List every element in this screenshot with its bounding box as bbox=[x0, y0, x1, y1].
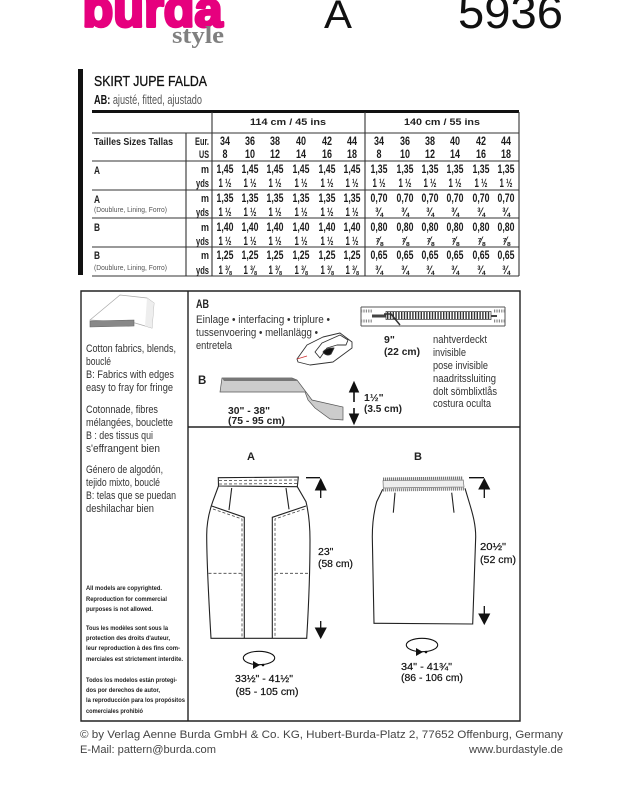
fabric recommendations: tejido mixto, bouclé bbox=[86, 477, 160, 489]
size and yardage values: 1,45 bbox=[266, 164, 284, 176]
size and yardage values: 1,40 bbox=[266, 222, 284, 234]
size and yardage values: 40 bbox=[296, 136, 306, 148]
size and yardage values: ⅞ bbox=[451, 236, 460, 248]
row labels: A bbox=[94, 194, 100, 206]
width headers bbox=[250, 117, 480, 128]
fabric recommendations: Cotton fabrics, blends, bbox=[86, 343, 176, 355]
size and yardage values: 16 bbox=[322, 149, 332, 161]
skirt B length bbox=[480, 541, 516, 566]
unit labels: yds bbox=[196, 207, 209, 219]
skirt A length: 23" bbox=[318, 546, 334, 558]
fringe strip bbox=[220, 378, 343, 420]
size and yardage values: 1 ½ bbox=[372, 178, 386, 190]
size and yardage values: 42 bbox=[322, 136, 332, 148]
size and yardage values: ¾ bbox=[401, 265, 410, 277]
size and yardage values: ¾ bbox=[477, 207, 486, 219]
subtitle: AB: ajusté, fitted, ajustado bbox=[94, 93, 202, 107]
size and yardage values: 1,35 bbox=[498, 164, 515, 176]
size and yardage values: 1 ½ bbox=[346, 236, 359, 248]
hip size A: 33½" - 41½" bbox=[235, 673, 293, 685]
size and yardage values: 0,80 bbox=[422, 222, 438, 234]
zipper text: invisible bbox=[433, 347, 466, 359]
size and yardage values: 1,35 bbox=[370, 164, 388, 176]
hip size B bbox=[401, 661, 463, 684]
skirt B length: (52 cm) bbox=[480, 554, 516, 566]
size and yardage values: 0,80 bbox=[498, 222, 514, 234]
size and yardage values: 1,35 bbox=[396, 164, 414, 176]
size and yardage values: 1 ⅜ bbox=[268, 265, 282, 277]
size and yardage values: 8 bbox=[222, 149, 228, 161]
copyright notice: Todos los modelos están protegi- bbox=[86, 677, 177, 684]
size and yardage values: 1,40 bbox=[216, 222, 234, 234]
strip length: (75 - 95 cm) bbox=[228, 415, 285, 427]
size and yardage values: 1 ⅜ bbox=[218, 265, 232, 277]
size and yardage values: 1 ½ bbox=[474, 178, 488, 190]
unit labels: m bbox=[201, 222, 209, 234]
size and yardage values: 0,70 bbox=[446, 193, 464, 205]
size and yardage values: 1,25 bbox=[216, 250, 234, 262]
footer website: www.burdastyle.de bbox=[468, 744, 563, 756]
size and yardage values: 36 bbox=[400, 136, 410, 148]
size and yardage values: ¾ bbox=[426, 265, 435, 277]
skirt B length arrow bbox=[469, 478, 490, 624]
size and yardage values: ⅞ bbox=[502, 236, 511, 248]
size and yardage values: 1,45 bbox=[344, 164, 361, 176]
size and yardage values: 1,45 bbox=[292, 164, 310, 176]
unit labels: yds bbox=[196, 236, 209, 248]
unit labels bbox=[195, 136, 209, 277]
size and yardage values: 1 ½ bbox=[294, 207, 308, 219]
fabric recommendations: bouclé bbox=[86, 356, 111, 368]
panel frame bbox=[81, 291, 520, 721]
unit labels: Eur. bbox=[195, 136, 209, 148]
fabric recommendations: Género de algodón, bbox=[86, 464, 163, 476]
size and yardage values: 1 ½ bbox=[218, 207, 232, 219]
fabric recommendations: Cotonnade, fibres bbox=[86, 404, 158, 416]
footer copyright: © by Verlag Aenne Burda GmbH & Co. KG, Hubert-Burda-Platz 2, 77652 Offenburg, Germany bbox=[80, 729, 564, 741]
width headers: 114 cm / 45 ins bbox=[250, 117, 326, 128]
size and yardage values: 0,65 bbox=[498, 250, 515, 262]
fabric recommendations: B : des tissus qui bbox=[86, 430, 153, 442]
table grid bbox=[92, 110, 519, 276]
size and yardage values: 1 ½ bbox=[294, 236, 308, 248]
size and yardage values: 1,45 bbox=[216, 164, 234, 176]
copyright notice: la reproducción para los propósitos bbox=[86, 697, 185, 704]
size and yardage values: 8 bbox=[376, 149, 382, 161]
copyright notice: All models are copyrighted. bbox=[86, 585, 162, 592]
size and yardage values: 1 ½ bbox=[268, 207, 282, 219]
fabric recommendations: B: telas que se puedan bbox=[86, 490, 176, 502]
size and yardage values: 1,40 bbox=[318, 222, 336, 234]
fabric recommendations bbox=[86, 343, 176, 515]
size and yardage values: 0,65 bbox=[446, 250, 464, 262]
size and yardage values: 0,70 bbox=[498, 193, 514, 205]
size and yardage values: 14 bbox=[450, 149, 460, 161]
zipper length: (22 cm) bbox=[384, 346, 420, 358]
B label for fringe strip: B bbox=[198, 375, 206, 387]
title: SKIRT JUPE FALDA bbox=[94, 73, 207, 90]
fabric recommendations: mélangées, bouclette bbox=[86, 417, 173, 429]
size and yardage values: 1 ½ bbox=[398, 178, 412, 190]
size and yardage values: 1 ⅜ bbox=[244, 265, 257, 277]
size and yardage values: 1 ½ bbox=[218, 236, 232, 248]
fabric recommendations: deshilachar bien bbox=[86, 503, 154, 515]
zipper text: nahtverdeckt bbox=[433, 334, 487, 346]
size and yardage values: 18 bbox=[347, 149, 357, 161]
row labels: B bbox=[94, 222, 100, 234]
skirt B bbox=[372, 478, 476, 624]
size and yardage values: 10 bbox=[400, 149, 410, 161]
unit labels: yds bbox=[196, 178, 209, 190]
size and yardage values: 12 bbox=[425, 149, 435, 161]
size and yardage values: ⅞ bbox=[477, 236, 486, 248]
size and yardage values: 1,35 bbox=[422, 164, 439, 176]
size and yardage values: 0,65 bbox=[422, 250, 439, 262]
row labels: B bbox=[94, 250, 100, 262]
size and yardage values: 1 ½ bbox=[346, 178, 359, 190]
unit labels: m bbox=[201, 250, 209, 262]
zipper length bbox=[384, 334, 420, 358]
skirt A bbox=[207, 477, 310, 638]
size and yardage values: 1,35 bbox=[344, 193, 361, 205]
size and yardage values: 1,35 bbox=[242, 193, 259, 205]
copyright notice bbox=[86, 585, 185, 715]
size and yardage values: ⅞ bbox=[375, 236, 384, 248]
strip width bbox=[364, 392, 402, 415]
size and yardage values: 0,80 bbox=[446, 222, 464, 234]
size and yardage values: ¾ bbox=[451, 265, 460, 277]
size and yardage values: 1,25 bbox=[242, 250, 259, 262]
strip length: 30" - 38" bbox=[228, 405, 270, 417]
skirt A length arrow bbox=[306, 478, 326, 638]
size and yardage values bbox=[216, 136, 515, 277]
size and yardage values: 1 ⅜ bbox=[346, 265, 359, 277]
size and yardage values: 18 bbox=[501, 149, 511, 161]
zipper text: costura oculta bbox=[433, 398, 492, 410]
size and yardage values: 0,80 bbox=[370, 222, 388, 234]
fabric recommendations: B: Fabrics with edges bbox=[86, 369, 174, 381]
size and yardage values: 1,40 bbox=[292, 222, 310, 234]
icon: hip measure B bbox=[406, 638, 438, 656]
icon: fabric stack bbox=[90, 295, 154, 328]
size and yardage values: 1 ½ bbox=[424, 178, 437, 190]
hip size A bbox=[235, 673, 298, 698]
icon: hip measure A bbox=[243, 651, 275, 669]
size and yardage values: 42 bbox=[476, 136, 486, 148]
copyright notice: leur reproduction à des fins com- bbox=[86, 645, 180, 652]
size and yardage values: ⅞ bbox=[401, 236, 410, 248]
copyright notice: Reproduction for commercial bbox=[86, 596, 167, 603]
size and yardage values: 1,35 bbox=[216, 193, 234, 205]
size and yardage values: 44 bbox=[501, 136, 511, 148]
yardage table bbox=[92, 110, 519, 277]
interfacing text: entretela bbox=[196, 340, 233, 352]
row labels: Tailles Sizes Tallas bbox=[94, 136, 173, 148]
size and yardage values: 1 ½ bbox=[320, 178, 334, 190]
size and yardage values: ¾ bbox=[375, 207, 384, 219]
label A: A bbox=[247, 451, 255, 463]
size and yardage values: 1,45 bbox=[242, 164, 259, 176]
copyright notice: merciales est strictement interdite. bbox=[86, 656, 183, 663]
size and yardage values: 1 ½ bbox=[448, 178, 462, 190]
interfacing text: Einlage • interfacing • triplure • bbox=[196, 314, 330, 326]
size and yardage values: ¾ bbox=[375, 265, 384, 277]
copyright notice: purposes is not allowed. bbox=[86, 606, 153, 613]
size and yardage values: 0,80 bbox=[472, 222, 490, 234]
zipper length: 9" bbox=[384, 334, 395, 346]
strip width: (3.5 cm) bbox=[364, 403, 402, 415]
size and yardage values: 10 bbox=[245, 149, 255, 161]
size and yardage values: 1,40 bbox=[344, 222, 360, 234]
size and yardage values: 1,25 bbox=[292, 250, 310, 262]
copyright notice: dos por derechos de autor, bbox=[86, 687, 160, 694]
size and yardage values: ¾ bbox=[426, 207, 435, 219]
size and yardage values: 1,35 bbox=[472, 164, 490, 176]
zipper text: naadritssluiting bbox=[433, 373, 496, 385]
size and yardage values: ⅞ bbox=[426, 236, 435, 248]
row labels: (Doublure, Lining, Forro) bbox=[94, 205, 167, 214]
size and yardage values: 1 ½ bbox=[268, 178, 282, 190]
size and yardage values: 0,70 bbox=[370, 193, 388, 205]
strip length bbox=[228, 405, 285, 427]
size and yardage values: 0,65 bbox=[396, 250, 414, 262]
size and yardage values: 1 ½ bbox=[346, 207, 359, 219]
unit labels: m bbox=[201, 193, 209, 205]
size and yardage values: 1,35 bbox=[266, 193, 284, 205]
size and yardage values: 38 bbox=[425, 136, 435, 148]
unit labels: m bbox=[201, 164, 209, 176]
size and yardage values: 1 ½ bbox=[268, 236, 282, 248]
hip size B: 34" - 41¾" bbox=[401, 661, 452, 673]
size and yardage values: ¾ bbox=[477, 265, 486, 277]
interfacing text: tussenvoering • mellanlägg • bbox=[196, 327, 318, 339]
size and yardage values: 34 bbox=[220, 136, 230, 148]
size and yardage values: 0,65 bbox=[370, 250, 388, 262]
row labels: (Doublure, Lining, Forro) bbox=[94, 263, 167, 272]
unit labels: yds bbox=[196, 265, 209, 277]
size and yardage values: 1 ½ bbox=[320, 207, 334, 219]
icon: iron bbox=[297, 333, 352, 365]
size and yardage values: ¾ bbox=[502, 265, 511, 277]
size and yardage values: 1 ½ bbox=[218, 178, 232, 190]
strip width: 1½" bbox=[364, 392, 384, 404]
interfacing text bbox=[196, 314, 330, 352]
size and yardage values: 0,65 bbox=[472, 250, 490, 262]
size and yardage values: 1,25 bbox=[266, 250, 284, 262]
size and yardage values: 1,25 bbox=[344, 250, 361, 262]
footer email: E-Mail: pattern@burda.com bbox=[80, 744, 216, 756]
size and yardage values: 1 ½ bbox=[244, 236, 257, 248]
copyright notice: Tous les modèles sont sous la bbox=[86, 625, 168, 632]
size and yardage values: 1 ½ bbox=[244, 207, 257, 219]
skirt A length bbox=[318, 546, 353, 570]
size and yardage values: 1,35 bbox=[318, 193, 336, 205]
interfacing heading: AB bbox=[196, 299, 209, 311]
size and yardage values: ¾ bbox=[451, 207, 460, 219]
zipper text bbox=[433, 334, 497, 410]
size and yardage values: 1,35 bbox=[446, 164, 464, 176]
size and yardage values: 44 bbox=[347, 136, 357, 148]
size and yardage values: 14 bbox=[296, 149, 306, 161]
unit labels: US bbox=[199, 149, 209, 161]
size and yardage values: ¾ bbox=[502, 207, 511, 219]
size and yardage values: 1,45 bbox=[318, 164, 336, 176]
size and yardage values: 38 bbox=[270, 136, 280, 148]
size and yardage values: 1,40 bbox=[242, 222, 258, 234]
fabric recommendations: s'effrangent bien bbox=[86, 443, 160, 455]
skirt B length: 20½" bbox=[480, 541, 506, 553]
size and yardage values: 40 bbox=[450, 136, 460, 148]
copyright notice: protection des droits d'auteur, bbox=[86, 635, 170, 642]
logo: burda style: style bbox=[172, 23, 224, 49]
width headers: 140 cm / 55 ins bbox=[404, 117, 480, 128]
size and yardage values: 0,70 bbox=[422, 193, 438, 205]
arrow: strip width bbox=[350, 382, 358, 424]
size and yardage values: 1 ½ bbox=[320, 236, 334, 248]
size and yardage values: 0,70 bbox=[396, 193, 414, 205]
label B: B bbox=[414, 451, 422, 463]
size and yardage values: 0,70 bbox=[472, 193, 490, 205]
size and yardage values: 1 ½ bbox=[294, 178, 308, 190]
size and yardage values: 1 ⅜ bbox=[294, 265, 308, 277]
size and yardage values: 34 bbox=[374, 136, 384, 148]
size and yardage values: 1,25 bbox=[318, 250, 336, 262]
hip size A: (85 - 105 cm) bbox=[236, 686, 298, 698]
copyright notice: comerciales prohibió bbox=[86, 708, 143, 715]
skirt A length: (58 cm) bbox=[318, 558, 353, 570]
size and yardage values: 16 bbox=[476, 149, 486, 161]
size and yardage values: 0,80 bbox=[396, 222, 414, 234]
size and yardage values: 1 ½ bbox=[244, 178, 257, 190]
size and yardage values: 1,35 bbox=[292, 193, 310, 205]
size and yardage values: 36 bbox=[245, 136, 255, 148]
hip size B: (86 - 106 cm) bbox=[401, 672, 463, 684]
row labels: A bbox=[94, 165, 100, 177]
left accent bar bbox=[78, 69, 83, 275]
size and yardage values: 1 ½ bbox=[500, 178, 513, 190]
row labels bbox=[94, 136, 173, 272]
fabric recommendations: easy to fray for fringe bbox=[86, 382, 173, 394]
size and yardage values: ¾ bbox=[401, 207, 410, 219]
zipper text: pose invisible bbox=[433, 360, 488, 372]
icon: zipper bbox=[361, 307, 505, 326]
zipper text: dolt sömblixtlås bbox=[433, 386, 497, 398]
size and yardage values: 1 ⅜ bbox=[320, 265, 334, 277]
size and yardage values: 12 bbox=[270, 149, 280, 161]
